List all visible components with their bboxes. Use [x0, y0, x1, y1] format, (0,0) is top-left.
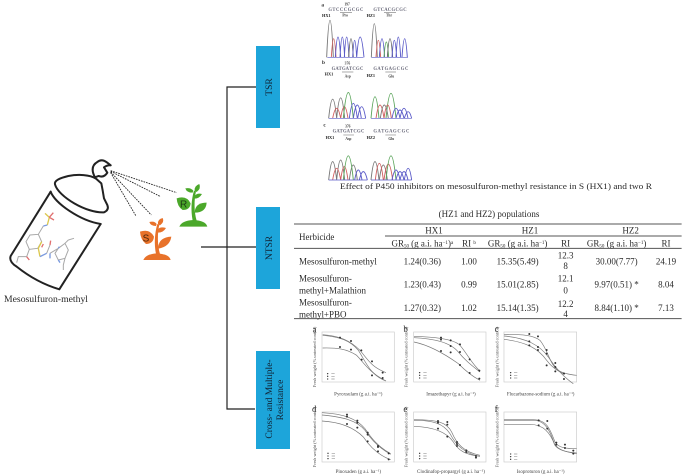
table header: 50 [599, 244, 605, 249]
row: Mesosulfuron-methyl+PBO: 15.14(1.35) [497, 303, 539, 313]
row: Mesosulfuron-methyl+PBO: 7.13 [658, 303, 674, 313]
table header: −1 [638, 241, 644, 246]
table header: −1 [539, 241, 545, 246]
chart f: Isoproturon: Isoproturon (g a.i. ha⁻¹) [517, 469, 565, 475]
table header: a [451, 241, 454, 246]
table header: HX1 [425, 225, 443, 235]
row: Mesosulfuron-methyl+PBO: methyl+PBO [299, 310, 347, 320]
box: Cross- and Multiple-Resistance: Resistance [276, 380, 286, 420]
chart b: Imazethapyr: Fresh weight (% untreated control) [404, 326, 409, 387]
row: Mesosulfuron-methyl: 1.24(0.36) [404, 256, 441, 266]
panel b: 376 [345, 62, 350, 66]
table header: (g a.i. ha [505, 238, 539, 248]
table header: −1 [443, 241, 448, 246]
chart e: Clodinafop-propargyl: e [403, 404, 407, 414]
table header: (g a.i. ha [409, 238, 443, 248]
row: Mesosulfuron-methyl+PBO: Mesosulfuron- [299, 297, 352, 307]
chart e: Clodinafop-propargyl: Clodinafop-propargyl (g a.i. ha⁻¹) [417, 469, 485, 475]
panel a: Thr [386, 14, 392, 18]
chart e: Clodinafop-propargyl [403, 404, 486, 475]
icon: resistant plant R [177, 184, 207, 227]
table header: 50 [500, 244, 506, 249]
table header: b [473, 241, 476, 246]
row: Mesosulfuron-methyl+PBO: 1.02 [461, 303, 477, 313]
chart e: Clodinafop-propargyl: Fresh weight (% untreated control) [404, 406, 409, 467]
icon: susceptible plant S [140, 218, 171, 260]
panel c: G A T G A T C G C [333, 130, 365, 135]
chart d: Pinoxaden: d [312, 404, 317, 414]
row: Mesosulfuron-methyl: Mesosulfuron-methyl [299, 257, 377, 267]
row: Mesosulfuron-methyl: 12.3 [558, 251, 574, 261]
table header: HZ2 [622, 225, 639, 235]
box: NTSR [256, 207, 280, 289]
panel a: HZ1 [367, 13, 375, 18]
table header: GR [391, 238, 404, 248]
icon: susceptible plant S: S [143, 234, 150, 245]
chart a: Pyroxsulam: a [313, 325, 317, 335]
icon: spray dashes [111, 171, 177, 216]
chart f: Isoproturon: Fresh weight (% untreated control) [495, 406, 500, 467]
chart a: Pyroxsulam: Fresh weight (% untreated control) [312, 326, 317, 387]
panel c: Glu [388, 137, 394, 141]
row: Mesosulfuron-methyl+Malathion: 9.97(0.51) * [595, 280, 639, 290]
table header: RI [661, 238, 670, 248]
panel b: HX1 [325, 72, 333, 77]
chart f: Isoproturon: f [495, 404, 498, 414]
panel b [322, 60, 412, 118]
panel c: G A T G A G C G C [373, 130, 410, 135]
panel a: Pro [342, 14, 348, 18]
panel c: HX1 [326, 135, 334, 140]
panel b: b [322, 60, 325, 66]
icon: spray can [10, 160, 111, 289]
row: Mesosulfuron-methyl: 1.00 [461, 256, 477, 266]
table header: RI [462, 238, 471, 248]
panel b: HZ1 [367, 73, 375, 78]
row: Mesosulfuron-methyl: 15.35(5.49) [497, 256, 539, 266]
connector lines [201, 87, 256, 409]
chart b: Imazethapyr: Imazethapyr (g a.i. ha⁻¹) [426, 391, 476, 397]
chart a: Pyroxsulam [312, 325, 394, 397]
row: Mesosulfuron-methyl+PBO [299, 297, 674, 320]
panel a: 197 [344, 2, 350, 6]
row: Mesosulfuron-methyl+Malathion: 8.04 [658, 280, 674, 290]
row: Mesosulfuron-methyl: 24.19 [656, 256, 677, 266]
table header: 50 [404, 244, 409, 249]
table header: ) [643, 238, 646, 248]
icon: mesosulfuron-methyl molecule [17, 213, 74, 270]
box: TSR [256, 46, 280, 128]
row: Mesosulfuron-methyl+PBO: 1.27(0.32) [404, 303, 441, 313]
spray illustration [10, 160, 207, 289]
panel a: G T C C C G C G C [328, 8, 364, 13]
panel a: G T C A C G C G C [373, 8, 407, 13]
box: TSR: TSR [265, 78, 275, 96]
box: NTSR: NTSR [265, 235, 275, 260]
row: Mesosulfuron-methyl [299, 251, 677, 271]
table caption: (HZ1 and HZ2) populations [439, 209, 540, 219]
chart d: Pinoxaden [312, 404, 394, 475]
row: Mesosulfuron-methyl+PBO: 8.84(1.10) * [595, 303, 639, 313]
chart f: Isoproturon [495, 404, 577, 475]
chart c: Flucarbazone-sodium: Flucarbazone-sodium (g a.i. ha⁻¹) [507, 391, 575, 397]
row: Mesosulfuron-methyl+Malathion: 12.1 [558, 274, 574, 284]
sequencing chromatograms [321, 2, 412, 180]
table header: GR [488, 238, 500, 248]
table header: ) [544, 238, 547, 248]
box: Cross- and Multiple-Resistance [256, 351, 290, 449]
box: Cross- and Multiple-Resistance: Cross- and Multiple- [265, 359, 275, 439]
dose-response charts [312, 324, 577, 475]
row: Mesosulfuron-methyl+Malathion: 0.99 [461, 280, 477, 290]
row: Mesosulfuron-methyl+PBO: 12.2 [558, 299, 574, 309]
panel b: G A T G A G C G C [373, 67, 409, 72]
panel b: Asp [345, 74, 351, 78]
row: Mesosulfuron-methyl+Malathion: 0 [563, 286, 568, 296]
row: Mesosulfuron-methyl: 8 [563, 261, 568, 271]
panel c: c [323, 123, 326, 129]
table header: RI [561, 238, 570, 248]
chart b: Imazethapyr [403, 324, 486, 397]
chart c: Flucarbazone-sodium [495, 324, 577, 397]
row: Mesosulfuron-methyl+Malathion: Mesosulfuron- [299, 274, 352, 284]
table header: HZ1 [522, 225, 538, 235]
table header: GR [587, 238, 599, 248]
table caption: Effect of P450 inhibitors on mesosulfuron-methyl resistance in S (HX1) and two R [340, 181, 652, 191]
row: Mesosulfuron-methyl+Malathion: methyl+Malathion [299, 286, 366, 296]
panel c: Asp [345, 137, 351, 141]
table header: ) [448, 238, 451, 248]
table header: (g a.i. ha [604, 238, 638, 248]
panel a: HX1 [322, 13, 331, 18]
row: Mesosulfuron-methyl+PBO: 4 [563, 309, 568, 319]
row: Mesosulfuron-methyl+Malathion [299, 274, 674, 296]
chart d: Pinoxaden: Fresh weight (% untreated control) [312, 406, 317, 467]
table header [299, 225, 670, 249]
panel c: 376 [345, 125, 351, 129]
table caption [340, 181, 652, 219]
panel a [321, 2, 408, 57]
panel b: Glu [388, 74, 394, 78]
table header: Herbicide [299, 232, 334, 242]
row: Mesosulfuron-methyl: 30.00(7.77) [596, 256, 638, 266]
chart d: Pinoxaden: Pinoxaden (g a.i. ha⁻¹) [336, 469, 381, 475]
table: P450 inhibitor effect [294, 224, 682, 320]
panel c [323, 123, 412, 180]
row: Mesosulfuron-methyl+Malathion: 1.23(0.43) [404, 280, 441, 290]
chart a: Pyroxsulam: Pyroxsulam (g a.i. ha⁻¹) [334, 391, 383, 397]
label: Mesosulfuron-methyl: Mesosulfuron-methyl [4, 294, 89, 304]
chart c: Flucarbazone-sodium: Fresh weight (% untreated control) [495, 326, 500, 387]
row: Mesosulfuron-methyl+Malathion: 15.01(2.85) [497, 280, 539, 290]
chart b: Imazethapyr: b [403, 324, 408, 334]
icon: resistant plant R: R [180, 199, 187, 210]
panel b: G A T G A T C G C [332, 67, 364, 72]
chart c: Flucarbazone-sodium: c [495, 324, 499, 334]
panel c: HZ2 [367, 135, 375, 140]
panel a: a [321, 3, 324, 9]
